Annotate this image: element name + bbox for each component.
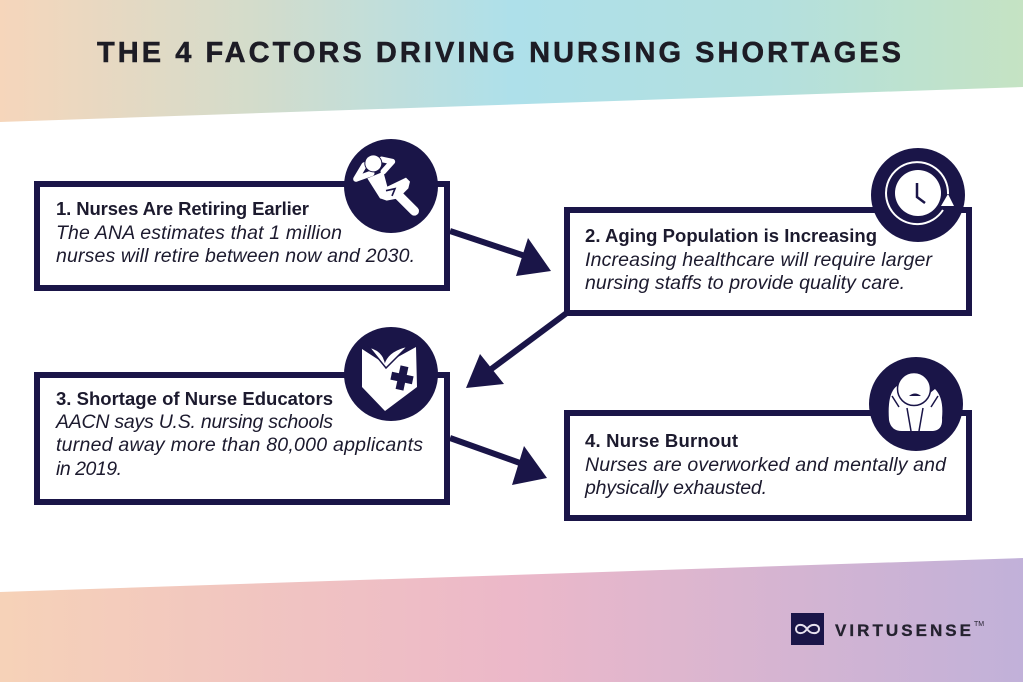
factor 2 body: Increasing healthcare will require larger [585,249,934,271]
factor 3 body: in 2019. [56,458,122,480]
panel: factor 1 [37,139,447,288]
factor 1 body: nurses will retire between now and 2030. [56,245,415,267]
icon: clock with circular arrow [871,148,965,242]
trademark: TM [974,621,984,628]
arrow: factor 3 to 4 [450,438,547,485]
factor 3 heading: 3. Shortage of Nurse Educators [56,388,333,409]
logo mark [791,613,824,645]
icon: reclining retiree [344,139,438,233]
title: THE 4 FACTORS DRIVING NURSING SHORTAGES [97,37,901,69]
logo wordmark: VIRTUSENSE [835,621,971,640]
factor 4 body: physically exhausted. [584,477,767,499]
factor 4 heading: 4. Nurse Burnout [585,430,738,451]
arrow: factor 1 to 2 [450,231,551,276]
factor 2 body: nursing staffs to provide quality care. [585,272,905,294]
icon: exhausted nurse [869,357,963,451]
icon: medical book [344,327,438,421]
arrow: factor 2 to 3 [466,312,568,388]
bottom gradient band [0,558,1023,682]
panel: factor 4 [567,357,969,518]
factor 3 body: turned away more than 80,000 applicants [56,434,423,456]
panel: factor 3 [37,327,447,502]
top gradient band [0,0,1023,122]
factor 3 body: AACN says U.S. nursing schools [55,411,333,433]
logo: Virtusense [791,613,984,645]
panel: factor 2 [567,148,969,313]
factor 4 body: Nurses are overworked and mentally and [585,454,947,476]
factor 2 heading: 2. Aging Population is Increasing [585,225,877,246]
factor 1 heading: 1. Nurses Are Retiring Earlier [56,198,309,219]
factor 1 body: The ANA estimates that 1 million [56,222,342,244]
